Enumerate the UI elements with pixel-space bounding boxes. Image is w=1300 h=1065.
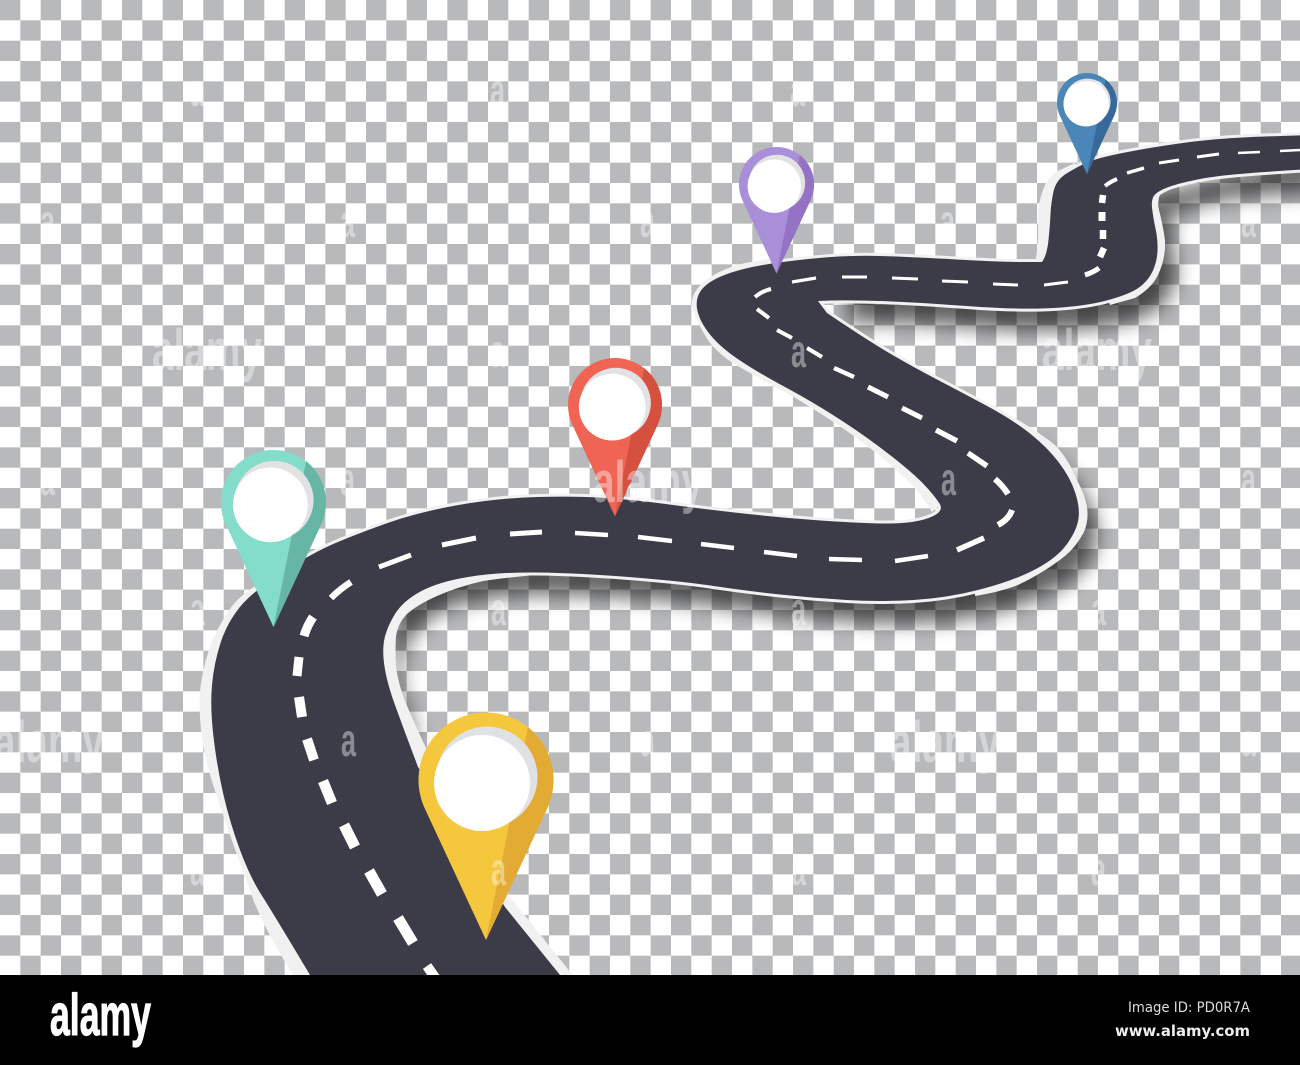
winding road (200, 135, 1300, 1006)
watermarks: a (790, 64, 805, 116)
watermarks: alamy (593, 450, 703, 515)
road white edge (200, 135, 1300, 984)
watermarks: a (491, 843, 506, 895)
watermarks: alamy (890, 710, 1000, 775)
watermarks: a (340, 195, 355, 247)
watermarks: a (341, 714, 356, 766)
watermarks: a (640, 195, 655, 247)
watermarks: a (791, 583, 806, 635)
watermarks: a (640, 714, 655, 766)
watermarks: a (40, 195, 55, 247)
watermarks: a (941, 453, 956, 505)
watermarks: a (1241, 714, 1256, 766)
watermarks: a (190, 583, 205, 635)
watermarks: a (490, 325, 505, 377)
watermarks: a (190, 64, 205, 116)
watermarks: a (40, 453, 55, 505)
watermarks: a (1090, 64, 1105, 116)
road centre dashes (297, 150, 1300, 986)
watermarks: a (940, 195, 955, 247)
watermarks: a (791, 843, 806, 895)
watermarks: a (1091, 843, 1106, 895)
footer logo: alamy (50, 983, 151, 1048)
watermarks: alamy (1042, 318, 1152, 383)
pin: yellow (418, 713, 554, 940)
website: www.alamy.com (1115, 1022, 1250, 1040)
watermarks: a (1091, 583, 1106, 635)
footer bar (0, 975, 1300, 1065)
watermarks: a (340, 453, 355, 505)
watermarks: a (1241, 195, 1256, 247)
pin: purple (739, 147, 814, 273)
watermarks: a (491, 583, 506, 635)
image id: Image ID: PD0R7A (1128, 1000, 1250, 1016)
watermarks: a (490, 64, 505, 116)
pin: red (568, 358, 662, 516)
watermarks: a (791, 325, 806, 377)
road asphalt (211, 135, 1300, 984)
road drop shadow (396, 172, 1300, 745)
watermarks (0, 64, 1256, 895)
watermarks: a (190, 843, 205, 895)
watermarks: alamy (152, 318, 262, 383)
pin: blue (1057, 73, 1117, 174)
pin: teal (221, 450, 326, 627)
watermarks: a (1241, 453, 1256, 505)
